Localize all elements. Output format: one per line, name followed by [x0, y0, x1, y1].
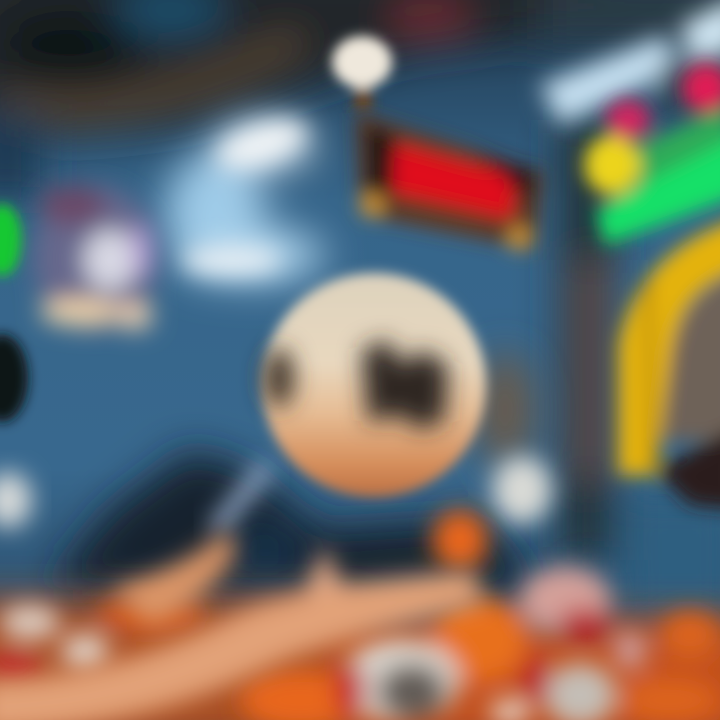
icon: white right ball	[492, 456, 552, 524]
floor shadow silhouettes	[60, 352, 540, 590]
icon: dark left marker	[0, 334, 28, 422]
icon: central ball	[262, 273, 486, 497]
banner: red flag	[356, 112, 545, 251]
icon: green left marker	[0, 204, 22, 276]
icon: pointer stick	[215, 465, 268, 530]
icon: outstretched arm and hand	[0, 530, 482, 720]
icon: white left ball	[0, 472, 32, 528]
orange and white floor objects	[0, 510, 720, 720]
icon: round badge at left	[33, 185, 157, 330]
icon: striped white awning	[540, 0, 720, 125]
orange floor pile	[0, 600, 720, 720]
light cloud glow	[165, 120, 325, 283]
icon: hanging white lamp	[332, 36, 392, 110]
right side dark pillar	[560, 120, 720, 620]
ball dark marks	[264, 340, 448, 430]
icon: yellow arch	[618, 218, 720, 510]
dark ceiling	[0, 0, 720, 200]
icon: upper white cloud	[182, 113, 311, 275]
icon: colored balls and green roof	[584, 64, 720, 245]
